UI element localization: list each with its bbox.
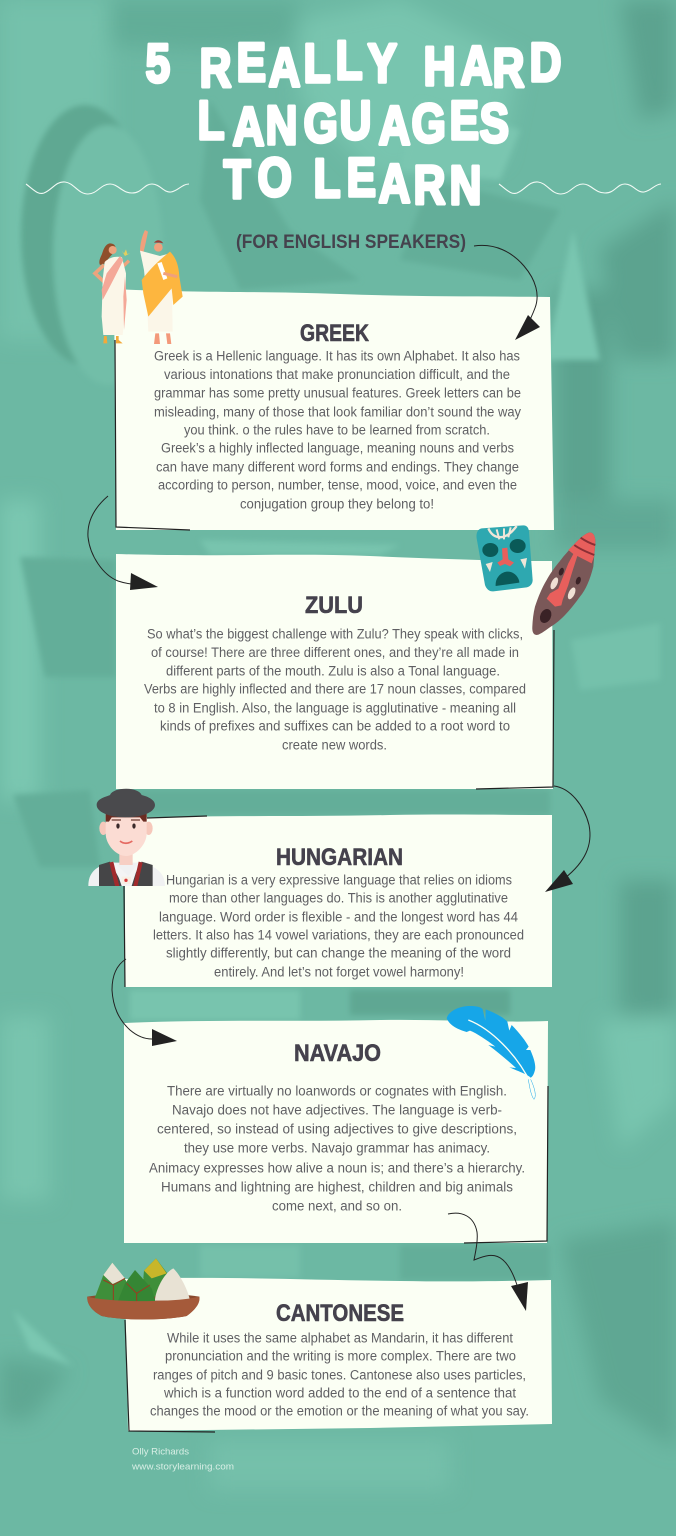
body text: Greek <box>154 348 521 512</box>
body text: Navajo <box>149 1084 525 1214</box>
body text: Greek: grammar has some pretty unusual features. Greek letters can be <box>154 386 521 400</box>
icon: rice dumplings in bowl <box>87 1258 200 1319</box>
body text: Greek: various intonations that make pronunciation difficult, and the <box>164 367 510 382</box>
body text: Greek: Greek is a Hellenic language. It has its own Alphabet. It also has <box>154 348 520 364</box>
body text: Hungarian: slightly differently, but can change the meaning of the word <box>166 946 511 960</box>
wavy decoration right <box>499 182 661 194</box>
panel: Cantonese <box>125 1278 552 1432</box>
body text: Hungarian: letters. It also has 14 vowel variations, they are each pronounced <box>153 928 524 942</box>
arrow: subtitle to Greek <box>474 245 540 340</box>
arrow: Navajo to Cantonese <box>448 1213 528 1311</box>
body text: Navajo: come next, and so on. <box>272 1198 402 1214</box>
footer credit <box>131 1446 234 1472</box>
body text: Zulu: to 8 in English. Also, the language is agglutinative - meaning all <box>154 700 516 716</box>
body text: Greek: can have many different word forms and endings. They change <box>156 460 519 474</box>
body text: Zulu <box>144 626 526 752</box>
wavy decoration left <box>26 182 189 194</box>
body text: Cantonese <box>150 1330 529 1418</box>
panel background <box>124 1020 548 1243</box>
panel background <box>116 554 553 789</box>
title: LANGUAGES <box>198 89 509 157</box>
body text: Zulu: So what’s the biggest challenge with Zulu? They speak with clicks, <box>147 626 523 642</box>
arrow: Hungarian to Navajo <box>112 959 177 1046</box>
panel background <box>125 1278 552 1431</box>
panel: Greek <box>114 289 554 530</box>
body text: Zulu: Verbs are highly inflected and there are 17 noun classes, compared <box>144 682 526 696</box>
body text: Zulu: different parts of the mouth. Zulu is also a Tonal language. <box>166 664 500 678</box>
panel: Zulu <box>116 554 554 789</box>
footer credit: Olly Richards <box>132 1446 189 1458</box>
panel: Navajo <box>124 1020 548 1243</box>
subtitle: (FOR ENGLISH SPEAKERS) <box>236 232 466 253</box>
body text: Greek: Greek’s a highly inflected language, meaning nouns and verbs <box>161 440 514 456</box>
body text: Hungarian: more than other languages do. This is another agglutinative <box>169 890 508 906</box>
body text: Cantonese: which is a function word added to the end of a sentence that <box>163 1386 516 1400</box>
body text: Cantonese: changes the mood or the emotion or the meaning of what you say. <box>150 1404 529 1418</box>
heading: Hungarian: HUNGARIAN <box>276 844 403 871</box>
body text: Zulu: kinds of prefixes and suffixes can be added to a root word to <box>160 718 510 734</box>
arrow: Zulu to Hungarian <box>545 786 590 892</box>
body text: Cantonese: ranges of pitch and 9 basic tones. Cantonese also uses particles, <box>153 1368 526 1382</box>
panel: Hungarian <box>124 815 552 987</box>
title: 5REALLYHARD <box>146 29 561 99</box>
title <box>146 29 561 216</box>
body text: Navajo: Navajo does not have adjectives. The language is verb- <box>172 1102 502 1118</box>
body text: Hungarian: language. Word order is flexible - and the longest word has 44 <box>159 910 518 924</box>
heading: Greek: GREEK <box>300 320 370 347</box>
body text: Navajo: centered, so instead of using adjectives to give descriptions, <box>157 1122 517 1136</box>
heading: Navajo: NAVAJO <box>294 1040 381 1067</box>
body text: Zulu: create new words. <box>282 738 387 752</box>
body text: Navajo: There are virtually no loanwords or cognates with English. <box>167 1084 507 1098</box>
panel background <box>125 815 552 987</box>
footer credit: www.storylearning.com <box>131 1462 234 1472</box>
body text: Hungarian: entirely. And let’s not forget vowel harmony! <box>214 964 464 980</box>
icon: brown oval mask <box>532 532 595 635</box>
heading: Cantonese: CANTONESE <box>276 1300 404 1327</box>
icon: Greek figures <box>95 230 183 344</box>
body text: Cantonese: While it uses the same alphabet as Mandarin, it has different <box>167 1330 513 1346</box>
body text: Hungarian: Hungarian is a very expressive language that relies on idioms <box>166 872 512 888</box>
body text: Navajo: they use more verbs. Navajo grammar has animacy. <box>184 1140 490 1156</box>
title: TOLEARN <box>224 146 481 216</box>
body text: Greek: conjugation group they belong to! <box>240 496 434 512</box>
panel background <box>114 289 554 530</box>
arrow: Greek to Zulu <box>88 496 158 590</box>
body text: Zulu: of course! There are three different ones, and they’re all made in <box>151 645 519 660</box>
heading: Zulu: ZULU <box>305 592 363 619</box>
icon: blue feather <box>447 1006 535 1099</box>
body text: Navajo: Humans and lightning are highest, children and big animals <box>161 1180 513 1194</box>
body text: Cantonese: pronunciation and the writing is more complex. There are two <box>165 1348 516 1364</box>
body text: Greek: you think. o the rules have to be learned from scratch. <box>184 422 490 438</box>
body text: Greek: misleading, many of those that look familiar don’t sound the way <box>154 404 521 420</box>
icon: Hungarian man <box>88 789 165 886</box>
body text: Hungarian <box>153 872 524 980</box>
body text: Greek: according to person, number, tense, mood, voice, and even the <box>158 478 517 492</box>
body text: Navajo: Animacy expresses how alive a noun is; and there’s a hierarchy. <box>149 1160 525 1176</box>
icon: teal tribal mask <box>477 525 533 591</box>
